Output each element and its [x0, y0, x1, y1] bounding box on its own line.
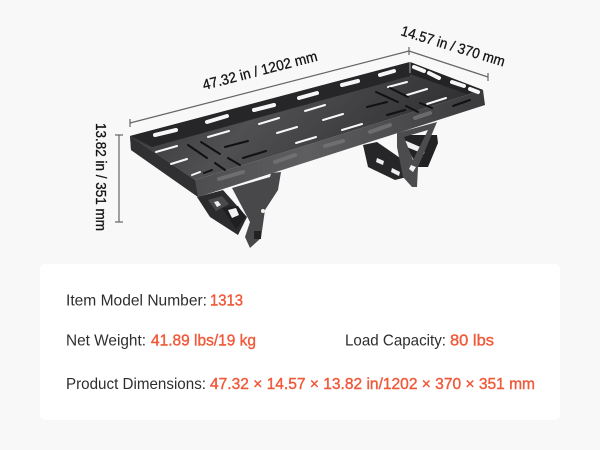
model number row: 1313 [210, 292, 243, 310]
tray floor [130, 62, 483, 180]
tray lip and side [130, 90, 485, 197]
left bracket assembly [197, 172, 281, 248]
net weight row: 41.89 lbs/19 kg [151, 332, 256, 350]
floor slots, light [156, 82, 446, 175]
floor slots and cross rails, dark [188, 88, 470, 173]
right bracket assembly [363, 122, 438, 187]
product: wall-mounted shelf rack [130, 62, 485, 248]
product dimensions row [66, 376, 535, 393]
lip slots [219, 113, 430, 179]
height label: 13.82 in / 351 mm [92, 123, 108, 231]
panel: specifications [40, 264, 560, 420]
load capacity: 80 lbs [450, 332, 494, 350]
net weight row [66, 332, 256, 350]
load capacity: Load Capacity: [345, 332, 446, 350]
back walls [130, 62, 410, 147]
dimension: length line [130, 51, 409, 127]
width label: 14.57 in / 370 mm [399, 24, 507, 70]
net weight row: Net Weight: [66, 332, 146, 350]
product dimensions row: 47.32 × 14.57 × 13.82 in/1202 × 370 × 351 mm [210, 376, 535, 393]
product dimensions row: Product Dimensions: [66, 376, 206, 393]
dimension: width line [409, 47, 488, 81]
back wall slots [155, 67, 478, 135]
model number row: Item Model Number: [66, 292, 207, 310]
dimension: height line [115, 135, 123, 222]
length label: 47.32 in / 1202 mm [201, 49, 319, 94]
